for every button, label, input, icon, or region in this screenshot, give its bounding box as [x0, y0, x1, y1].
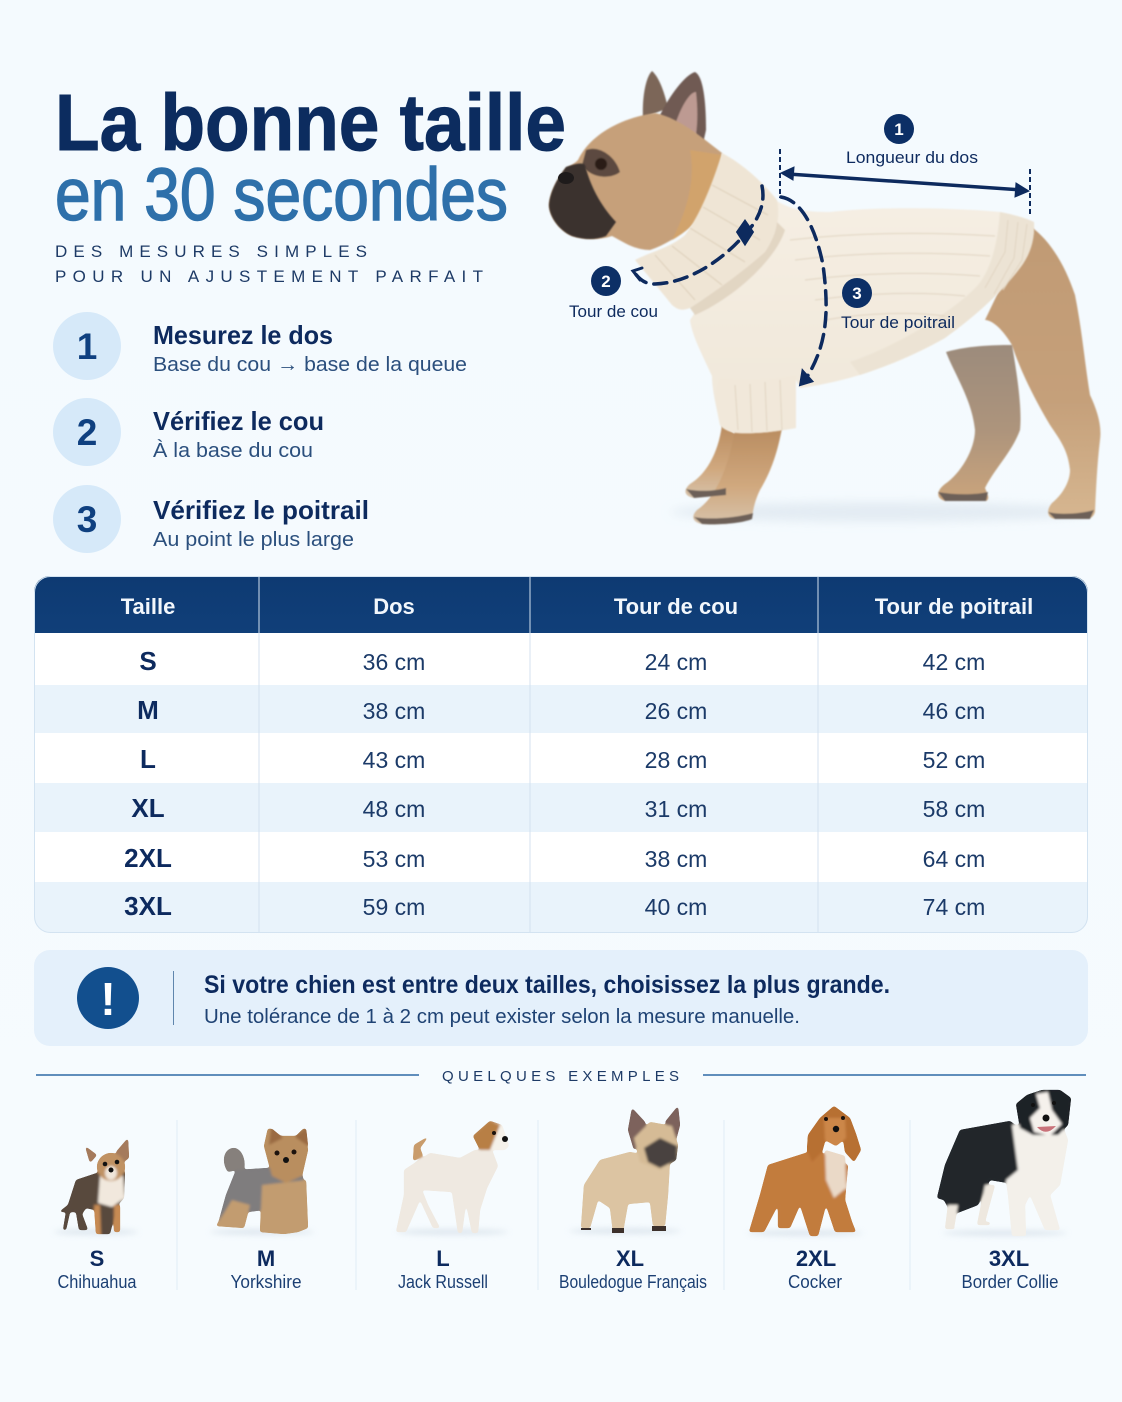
title: en 30 secondes [55, 153, 508, 236]
example 3XL: Border Collie: Border Collie [962, 1272, 1058, 1292]
row L: 52 cm [923, 747, 985, 773]
label 2: 2 [601, 272, 611, 291]
label 3 [841, 278, 955, 332]
row M: M [137, 695, 159, 725]
dog ears [643, 71, 706, 165]
step 3: 3 [77, 499, 97, 540]
step 2 [53, 398, 324, 466]
subtitle: POUR UN AJUSTEMENT PARFAIT [55, 267, 483, 286]
example 2XL: Cocker: Cocker [788, 1272, 842, 1292]
example 2XL: Cocker [747, 1106, 863, 1292]
row S: 42 cm [923, 649, 985, 675]
row M: 38 cm [363, 698, 425, 724]
callout: Une tolérance de 1 à 2 cm peut exister selon la mesure manuelle. [204, 1006, 800, 1028]
example XL: Bouledogue Français: Bouledogue Français [559, 1272, 707, 1292]
back length arrow [780, 149, 1030, 216]
row 3XL: 59 cm [363, 894, 425, 920]
step 3: Au point le plus large [153, 529, 354, 551]
row S: S [139, 646, 157, 676]
row 3XL: 3XL [124, 891, 172, 921]
example XL: Bouledogue Français: XL [616, 1246, 644, 1271]
icon: exclamation: ! [100, 973, 116, 1025]
row S [139, 646, 985, 676]
callout [34, 950, 1088, 1046]
example L: Jack Russell: Jack Russell [398, 1272, 488, 1292]
table header: Dos [373, 594, 415, 619]
row 2XL: 53 cm [363, 846, 425, 872]
table header [121, 594, 1033, 619]
size table [34, 576, 1088, 933]
row XL: 58 cm [923, 796, 985, 822]
step 1: Mesurez le dos [153, 320, 333, 350]
row 2XL: 64 cm [923, 846, 985, 872]
row 2XL [124, 843, 985, 873]
example S: Chihuahua [54, 1138, 138, 1292]
table header: Taille [121, 594, 175, 619]
example M: Yorkshire [210, 1128, 314, 1292]
example L: Jack Russell [396, 1121, 509, 1292]
label 2 [569, 266, 658, 321]
label 3: Tour de poitrail [841, 313, 955, 332]
step 1: 1 [77, 326, 97, 367]
step 2: Vérifiez le cou [153, 406, 324, 436]
example M: Yorkshire: M [257, 1246, 275, 1271]
row 2XL: 38 cm [645, 846, 707, 872]
example 3XL: Border Collie [937, 1090, 1071, 1292]
icon: exclamation [77, 967, 139, 1029]
row L: L [140, 744, 156, 774]
row 3XL [124, 891, 985, 921]
row 3XL: 74 cm [923, 894, 985, 920]
label 3: 3 [852, 284, 862, 303]
row XL: 48 cm [363, 796, 425, 822]
dog head [549, 113, 722, 250]
example XL: Bouledogue Français [559, 1106, 707, 1292]
step 2: 2 [77, 412, 97, 453]
example M: Yorkshire: Yorkshire [230, 1272, 302, 1292]
example S: Chihuahua: S [90, 1246, 104, 1271]
row XL: 31 cm [645, 796, 707, 822]
row XL: XL [131, 793, 165, 823]
table header: Tour de cou [614, 594, 738, 619]
row S: 36 cm [363, 649, 425, 675]
steps [53, 312, 467, 553]
row S: 24 cm [645, 649, 707, 675]
callout: Si votre chien est entre deux tailles, choisissez la plus grande. [204, 971, 890, 999]
row 3XL: 40 cm [645, 894, 707, 920]
row L: 28 cm [645, 747, 707, 773]
label 1: Longueur du dos [846, 148, 978, 167]
example 2XL: Cocker: 2XL [796, 1246, 836, 1271]
row M [137, 695, 985, 725]
illustration: french bulldog wearing a sweater [549, 71, 1100, 524]
label 1 [846, 114, 978, 167]
example S: Chihuahua: Chihuahua [58, 1272, 137, 1292]
label 2: Tour de cou [569, 302, 658, 321]
dog muzzle [549, 164, 616, 239]
chest measure [781, 197, 826, 384]
row XL [131, 793, 985, 823]
row L: 43 cm [363, 747, 425, 773]
table header: Tour de poitrail [875, 594, 1033, 619]
example L: Jack Russell: L [436, 1246, 450, 1271]
row 2XL: 2XL [124, 843, 172, 873]
title: La bonne taille [55, 78, 566, 167]
step 3: Vérifiez le poitrail [153, 495, 369, 525]
subtitle [55, 242, 483, 286]
row M: 26 cm [645, 698, 707, 724]
sweater [635, 153, 1034, 433]
step 1 [53, 312, 467, 380]
row M: 46 cm [923, 698, 985, 724]
subtitle: DES MESURES SIMPLES [55, 242, 367, 261]
example 3XL: Border Collie: 3XL [989, 1246, 1029, 1271]
examples heading: QUELQUES EXEMPLES [442, 1068, 679, 1085]
row L [140, 744, 985, 774]
neck measure [633, 186, 763, 284]
label 1: 1 [894, 120, 904, 139]
step 3 [53, 485, 369, 553]
step 2: À la base du cou [153, 439, 313, 462]
step 1: Base du cou → base de la queue [153, 354, 467, 376]
title [55, 78, 566, 236]
